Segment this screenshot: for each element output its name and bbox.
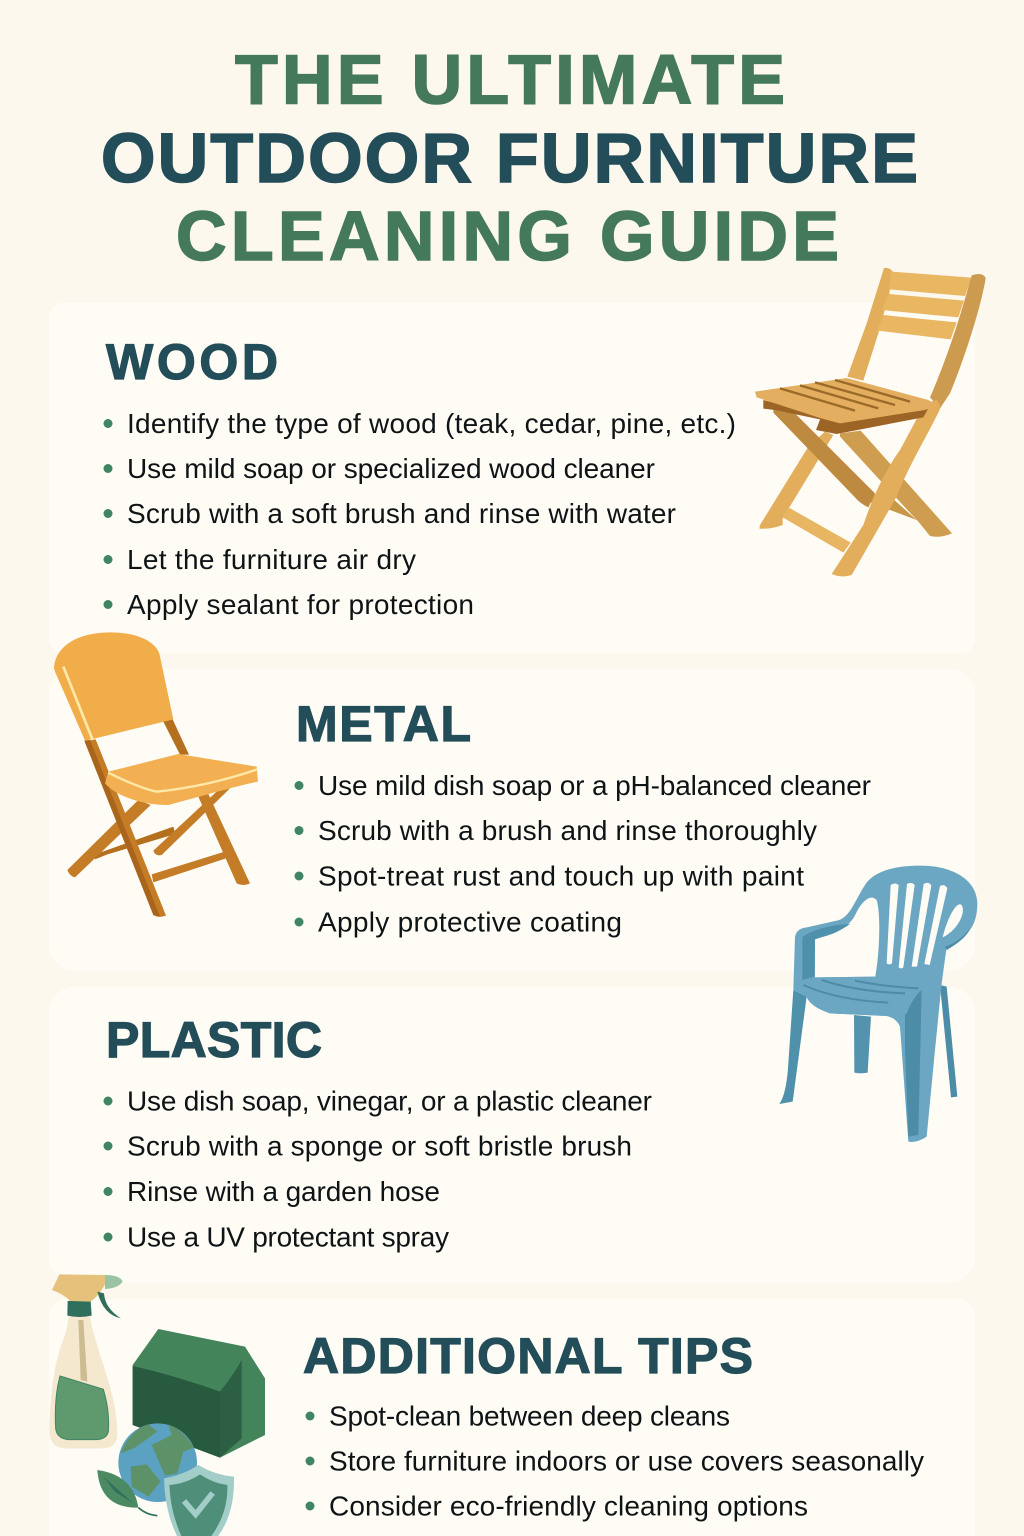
icon: furniture cover [133, 1329, 265, 1458]
icon: blue plastic chair [779, 866, 977, 1142]
list: wood steps: Let the furniture air dry [127, 544, 416, 575]
list: plastic steps [104, 1086, 652, 1252]
list: plastic steps: Rinse with a garden hose [127, 1176, 440, 1207]
icon: leaf [97, 1470, 157, 1516]
list: wood steps: Identify the type of wood (teak, cedar, pine, etc.) [127, 408, 736, 439]
list: tips: Store furniture indoors or use covers seasonally [329, 1446, 924, 1476]
heading: additional tips: ADDITIONAL TIPS [303, 1328, 753, 1384]
list: tips: Spot-clean between deep cleans [329, 1400, 730, 1432]
heading: metal: METAL [296, 696, 471, 752]
icon: globe [118, 1423, 197, 1502]
heading: wood: WOOD [106, 334, 278, 390]
list: plastic steps: Use a UV protectant spray [127, 1222, 449, 1252]
list: metal steps: Spot-treat rust and touch up with paint [318, 860, 804, 892]
list: tips [306, 1400, 924, 1522]
title: OUTDOOR FURNITURE [101, 119, 918, 197]
list: metal steps: Apply protective coating [318, 906, 622, 938]
list: tips: Consider eco-friendly cleaning options [329, 1490, 808, 1522]
list: wood steps [104, 408, 736, 620]
icon: spray bottle [49, 1274, 123, 1448]
list: wood steps: Apply sealant for protection [127, 589, 474, 620]
list: wood steps: Scrub with a soft brush and rinse with water [127, 498, 676, 529]
list: plastic steps: Use dish soap, vinegar, or a plastic cleaner [127, 1086, 652, 1116]
icon: shield with check [164, 1465, 234, 1536]
panel: additional tips [49, 1299, 975, 1536]
title: THE ULTIMATE [235, 40, 785, 118]
list: metal steps: Scrub with a brush and rinse thoroughly [318, 815, 817, 846]
icon: orange folding chair [54, 632, 258, 917]
list: metal steps: Use mild dish soap or a pH-balanced cleaner [318, 770, 871, 801]
panel: wood [49, 303, 975, 653]
heading: plastic: PLASTIC [106, 1012, 322, 1068]
list: metal steps [294, 770, 871, 938]
panel: metal [49, 669, 975, 970]
icon: cleaning supplies [49, 1274, 265, 1536]
title [101, 40, 918, 275]
list: plastic steps: Scrub with a sponge or soft bristle brush [127, 1130, 632, 1162]
icon: wooden folding chair [755, 268, 986, 576]
panel: plastic [49, 987, 975, 1282]
list: wood steps: Use mild soap or specialized wood cleaner [127, 453, 655, 484]
title: CLEANING GUIDE [176, 197, 839, 275]
